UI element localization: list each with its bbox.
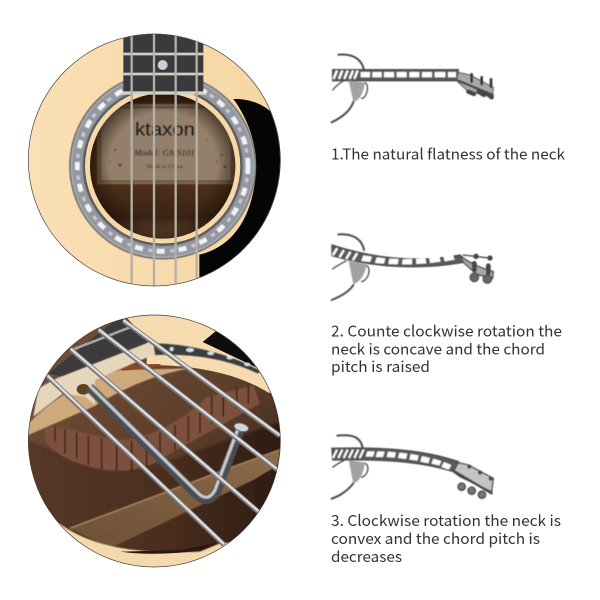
caption 3: decreases <box>331 546 402 567</box>
caption 1: 1.The natural flatness of the neck <box>331 144 566 164</box>
caption 3: 3. Clockwise rotation the neck is <box>331 510 561 531</box>
diagram: concave neck <box>332 234 493 300</box>
black binding at the right <box>199 99 280 278</box>
strings <box>132 30 197 297</box>
label text: Made in China <box>147 165 184 170</box>
caption 2 <box>331 320 562 377</box>
wood plank under the nut <box>28 368 190 435</box>
rosette ring <box>69 73 256 259</box>
label text: Model: GMS101 <box>133 148 195 157</box>
wooden brace <box>70 447 287 548</box>
caption 2: neck is concave and the chord <box>331 338 545 360</box>
rosette strip <box>153 343 262 373</box>
soundhole <box>87 90 240 240</box>
top wood <box>127 315 271 394</box>
photo: hex key in soundhole circle <box>20 310 287 577</box>
strings <box>47 321 280 545</box>
diagram: convex neck <box>332 435 493 499</box>
caption 2: pitch is raised <box>331 356 430 377</box>
fretboard <box>48 317 150 378</box>
lower interior <box>28 422 280 542</box>
kerfing <box>45 385 260 472</box>
headstock <box>457 72 493 97</box>
caption 2: 2. Counte clockwise rotation the <box>331 320 562 342</box>
headstock <box>453 463 493 498</box>
fretboard <box>123 30 203 93</box>
bottom wood rim <box>60 523 230 567</box>
black binding corner <box>202 331 256 368</box>
label text: ktaxon <box>135 118 195 139</box>
photo: soundhole and fretboard circle <box>20 30 287 297</box>
caption 3: convex and the chord pitch is <box>331 528 540 549</box>
headstock <box>460 254 493 283</box>
hex key <box>77 384 90 395</box>
label text <box>133 118 195 170</box>
nut strip <box>33 342 155 417</box>
diagram: flat neck <box>332 54 493 122</box>
caption 3 <box>331 510 561 567</box>
